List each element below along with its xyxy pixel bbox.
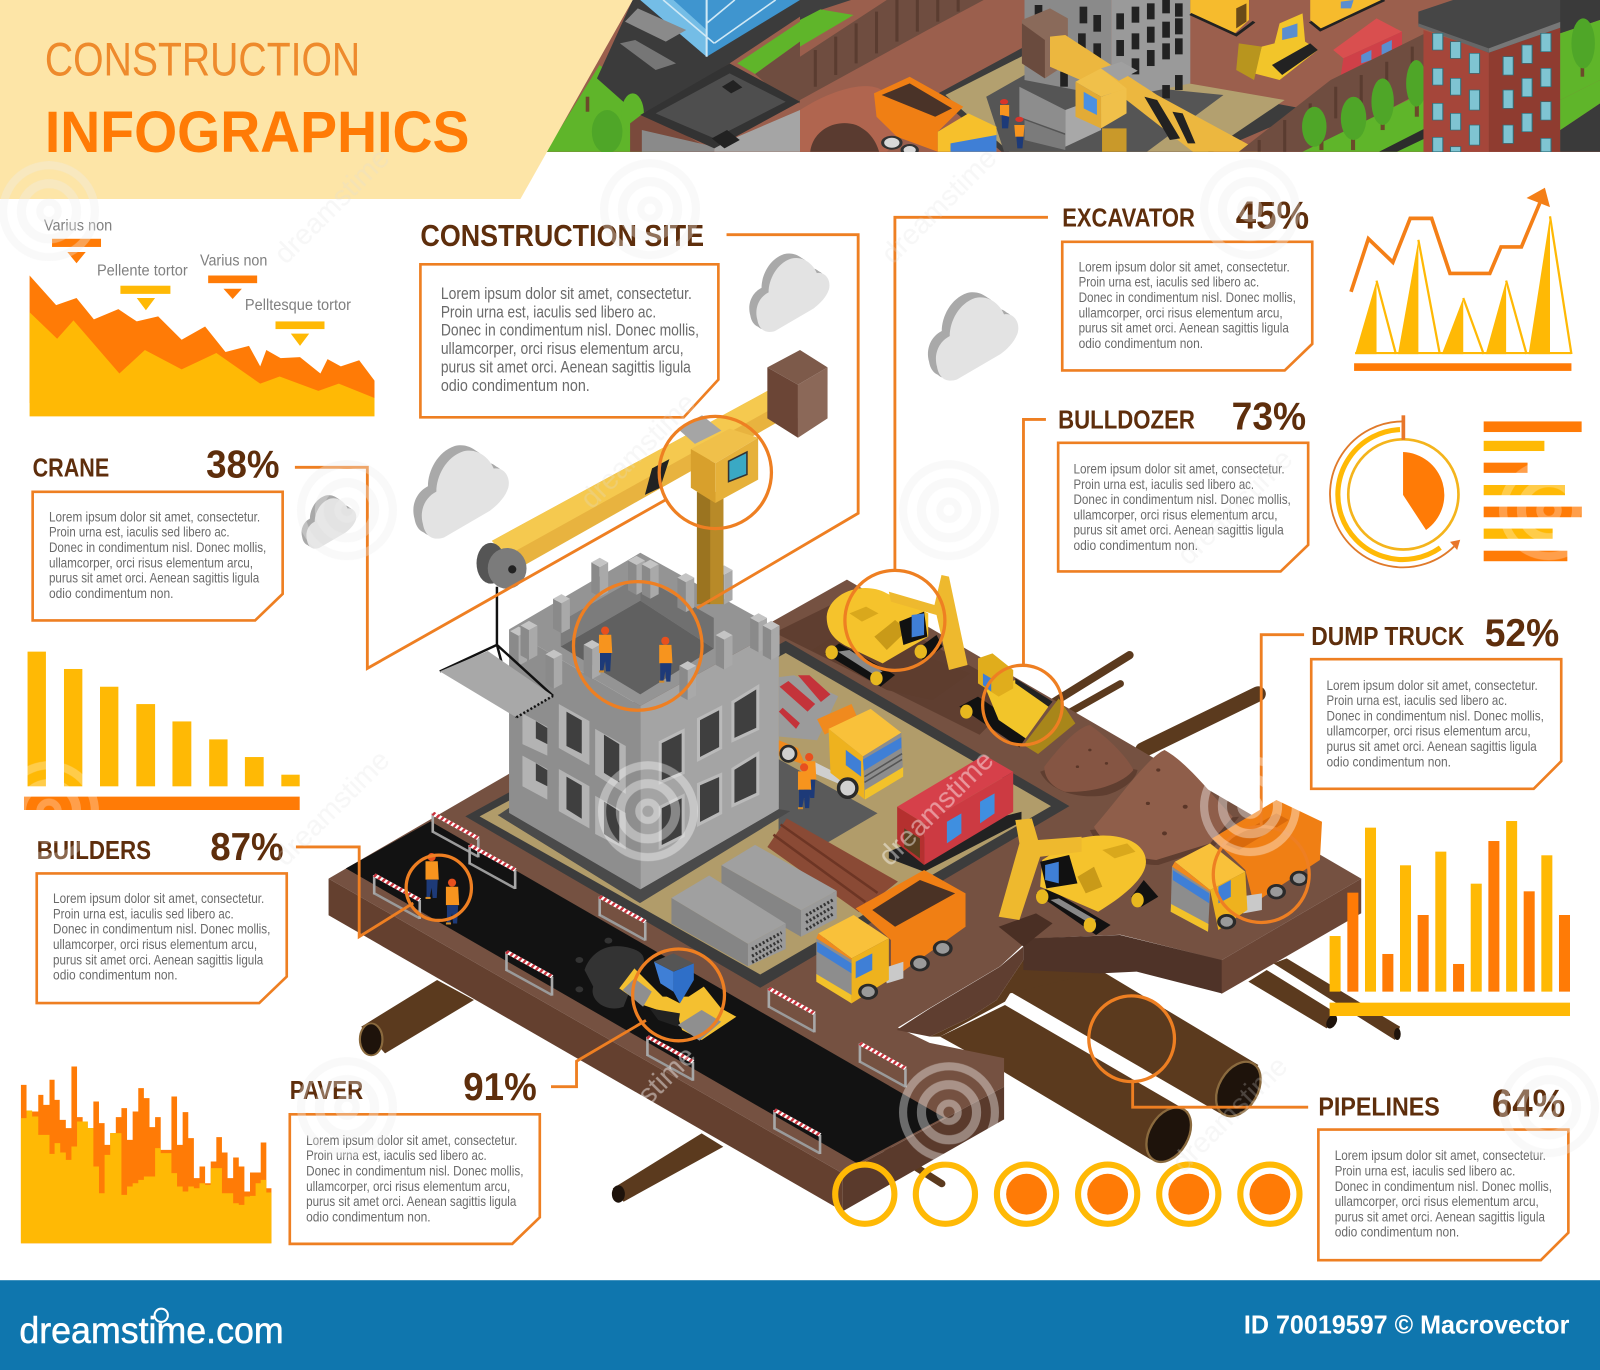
panel: paver: PAVER: [290, 1077, 363, 1105]
timber stack: [767, 818, 898, 912]
panel: crane: 38%: [206, 444, 280, 487]
panel: crane: CRANE: [33, 455, 109, 483]
soil mounds: [1040, 725, 1239, 865]
icon: cloud 2: [928, 292, 1018, 381]
icon: cloud 4: [302, 495, 356, 549]
panel: construction site: Lorem ipsum dolor sit amet, consectetur.: [441, 284, 692, 303]
footer bar: [0, 1280, 1600, 1370]
panel: bulldozer: Proin urna est, iaculis sed libero ac.: [1073, 476, 1254, 492]
watermark: dreamstime: [1171, 443, 1299, 571]
watermark: dreamstime: [268, 744, 396, 872]
panel: paver: odio condimentum non.: [306, 1208, 431, 1224]
watermark: [3, 142, 1595, 1178]
panel: crane: Donec in condimentum nisl. Donec mollis,: [49, 539, 266, 555]
panel: dump truck: Proin urna est, iaculis sed libero ac.: [1327, 692, 1507, 708]
panel: pipelines: Lorem ipsum dolor sit amet, consectetur.: [1335, 1147, 1546, 1163]
dump truck right: [1171, 800, 1322, 932]
panel: construction site: CONSTRUCTION SITE: [420, 219, 704, 253]
panel: crane: odio condimentum non.: [49, 585, 173, 601]
header image: isometric city construction scene: [541, 0, 1600, 155]
panel: builders: Proin urna est, iaculis sed libero ac.: [53, 905, 234, 921]
area chart top left with markers: Pelltesque tortor: [245, 297, 351, 314]
panel: paver: 91%: [463, 1066, 537, 1109]
area chart top left with markers: Pellente tortor: [97, 263, 188, 280]
panel: paver: Donec in condimentum nisl. Donec mollis,: [306, 1163, 523, 1179]
site ground with dark border: [465, 641, 1069, 988]
panel: construction site: purus sit amet orci. Aenean sagittis ligula: [441, 357, 691, 376]
concrete mixer truck: [779, 675, 903, 800]
road asphalt: [346, 821, 944, 1163]
chart: radial gauge with pie wedge: [1330, 415, 1460, 567]
panel: paver: ullamcorper, orci risus elementum arcu,: [306, 1178, 510, 1194]
panel: bulldozer: purus sit amet orci. Aenean sagittis ligula: [1073, 522, 1284, 538]
area chart top left with markers: [30, 218, 374, 416]
panel: dump truck: Donec in condimentum nisl. Donec mollis,: [1327, 707, 1544, 723]
title: construction: CONSTRUCTION: [45, 34, 360, 86]
panel: excavator: ullamcorper, orci risus elementum arcu,: [1079, 304, 1283, 320]
watermark: dreamstime: [872, 744, 1000, 872]
panel: construction site: Proin urna est, iaculis sed libero ac.: [441, 302, 656, 321]
focus circles on scene: [406, 416, 1309, 1082]
panel: excavator: odio condimentum non.: [1079, 335, 1203, 351]
panel: pipelines: PIPELINES: [1318, 1093, 1440, 1121]
crane with counterweight, cabin and hook: [440, 350, 828, 717]
ground platform: [329, 580, 1361, 1211]
panel: pipelines: Proin urna est, iaculis sed libero ac.: [1335, 1163, 1515, 1179]
panel: dump truck: Lorem ipsum dolor sit amet, consectetur.: [1327, 677, 1538, 693]
panel: construction site: Donec in condimentum nisl. Donec mollis,: [441, 321, 699, 340]
panel: bulldozer: odio condimentum non.: [1073, 537, 1198, 553]
panel: bulldozer: Lorem ipsum dolor sit amet, consectetur.: [1073, 460, 1285, 476]
panel: bulldozer: 73%: [1232, 396, 1306, 439]
panel: builders: purus sit amet orci. Aenean sagittis ligula: [53, 951, 264, 967]
panel: pipelines: odio condimentum non.: [1335, 1224, 1459, 1240]
chart: vertical bars right: [1330, 821, 1570, 1016]
panel: crane: ullamcorper, orci risus elementum arcu,: [49, 554, 253, 570]
panel: dump truck: odio condimentum non.: [1327, 753, 1451, 769]
chart: triangles with rising arrow: [1351, 188, 1571, 371]
footer: image id and author: ID 70019597 © Macrovector: [1244, 1312, 1569, 1340]
watermark: dreamstime: [1166, 1050, 1294, 1178]
panel: bulldozer: BULLDOZER: [1058, 407, 1195, 435]
excavator front: [999, 818, 1158, 947]
panel: dump truck: ullamcorper, orci risus elementum arcu,: [1327, 723, 1531, 739]
chart: horizontal bars: [1484, 421, 1582, 561]
panel: builders: ullamcorper, orci risus elementum arcu,: [53, 936, 257, 952]
watermark: dreamstime: [268, 142, 396, 270]
chart: descending bars left: [24, 652, 300, 810]
concrete building under construction: [498, 553, 790, 903]
icon: cloud 1: [749, 254, 829, 332]
panel: pipelines: 64%: [1492, 1082, 1565, 1125]
progress ring row: [835, 1165, 1299, 1224]
panel: builders: 87%: [210, 826, 284, 869]
area chart top left with markers: Varius non: [44, 218, 112, 235]
chart: stepped histogram bottom left: [21, 1066, 271, 1243]
panel: dump truck: purus sit amet orci. Aenean sagittis ligula: [1327, 738, 1537, 754]
bulldozer: [959, 653, 1075, 754]
paver roller: [619, 953, 736, 1041]
panel: pipelines: ullamcorper, orci risus elementum arcu,: [1335, 1193, 1539, 1209]
road barriers, smoke and paver: [374, 813, 905, 1154]
icon: cloud 3: [413, 445, 509, 539]
panel: builders: [37, 826, 287, 1003]
panel: dump truck: [1311, 612, 1561, 789]
watermark: dreamstime: [574, 1040, 702, 1168]
panel: paver: purus sit amet orci. Aenean sagittis ligula: [306, 1193, 517, 1209]
concrete slab stacks: [671, 845, 837, 966]
panel: excavator: purus sit amet orci. Aenean sagittis ligula: [1079, 320, 1289, 336]
panel: bulldozer: ullamcorper, orci risus elementum arcu,: [1073, 506, 1278, 522]
panel: builders: odio condimentum non.: [53, 967, 178, 983]
underground pipes: [360, 655, 1401, 1203]
panel: dump truck: DUMP TRUCK: [1311, 623, 1465, 651]
panel: crane: [33, 444, 283, 620]
panel: builders: Lorem ipsum dolor sit amet, consectetur.: [53, 890, 264, 906]
panel: construction site: odio condimentum non.: [441, 376, 590, 395]
panel: builders: BUILDERS: [37, 837, 151, 865]
panel: excavator: EXCAVATOR: [1062, 205, 1195, 233]
vehicles on site: [812, 575, 1322, 1003]
panel: paver: Proin urna est, iaculis sed libero ac.: [306, 1147, 487, 1163]
panel: pipelines: Donec in condimentum nisl. Donec mollis,: [1335, 1178, 1552, 1194]
workers: [426, 627, 816, 924]
panel: builders: Donec in condimentum nisl. Donec mollis,: [53, 921, 270, 937]
area chart top left with markers: Varius non: [200, 252, 267, 269]
panel: paver: [290, 1066, 540, 1244]
watermark: dreamstime: [875, 142, 1003, 270]
panel: crane: Lorem ipsum dolor sit amet, consectetur.: [49, 508, 260, 524]
panel: construction site: ullamcorper, orci risus elementum arcu,: [441, 339, 684, 358]
title: infographics: INFOGRAPHICS: [45, 100, 469, 165]
watermark: dreamstime: [574, 387, 702, 515]
panel: excavator: 45%: [1236, 195, 1309, 238]
panel: excavator: Proin urna est, iaculis sed libero ac.: [1079, 274, 1259, 290]
dump truck front: [816, 870, 966, 1003]
excavator top: [812, 575, 970, 700]
panel: paver: Lorem ipsum dolor sit amet, consectetur.: [306, 1132, 517, 1148]
panel: dump truck: 52%: [1485, 612, 1559, 655]
panel: pipelines: [1318, 1082, 1568, 1260]
panel: bulldozer: [1058, 396, 1308, 571]
panel: crane: purus sit amet orci. Aenean sagittis ligula: [49, 570, 259, 586]
panel: crane: Proin urna est, iaculis sed libero ac.: [49, 524, 230, 540]
panel: excavator: [1062, 195, 1312, 370]
panel: pipelines: purus sit amet orci. Aenean sagittis ligula: [1335, 1208, 1545, 1224]
panel: construction site: [420, 219, 718, 417]
callout leader lines: [295, 217, 1308, 1107]
header banner: cream title panel: [0, 0, 633, 199]
panel: bulldozer: Donec in condimentum nisl. Donec mollis,: [1073, 491, 1291, 507]
panel: excavator: Donec in condimentum nisl. Donec mollis,: [1079, 289, 1296, 305]
footer: dreamstime logo: dreamstime.com: [19, 1310, 284, 1351]
red site trailer: [889, 755, 1021, 872]
panel: excavator: Lorem ipsum dolor sit amet, consectetur.: [1079, 258, 1290, 274]
